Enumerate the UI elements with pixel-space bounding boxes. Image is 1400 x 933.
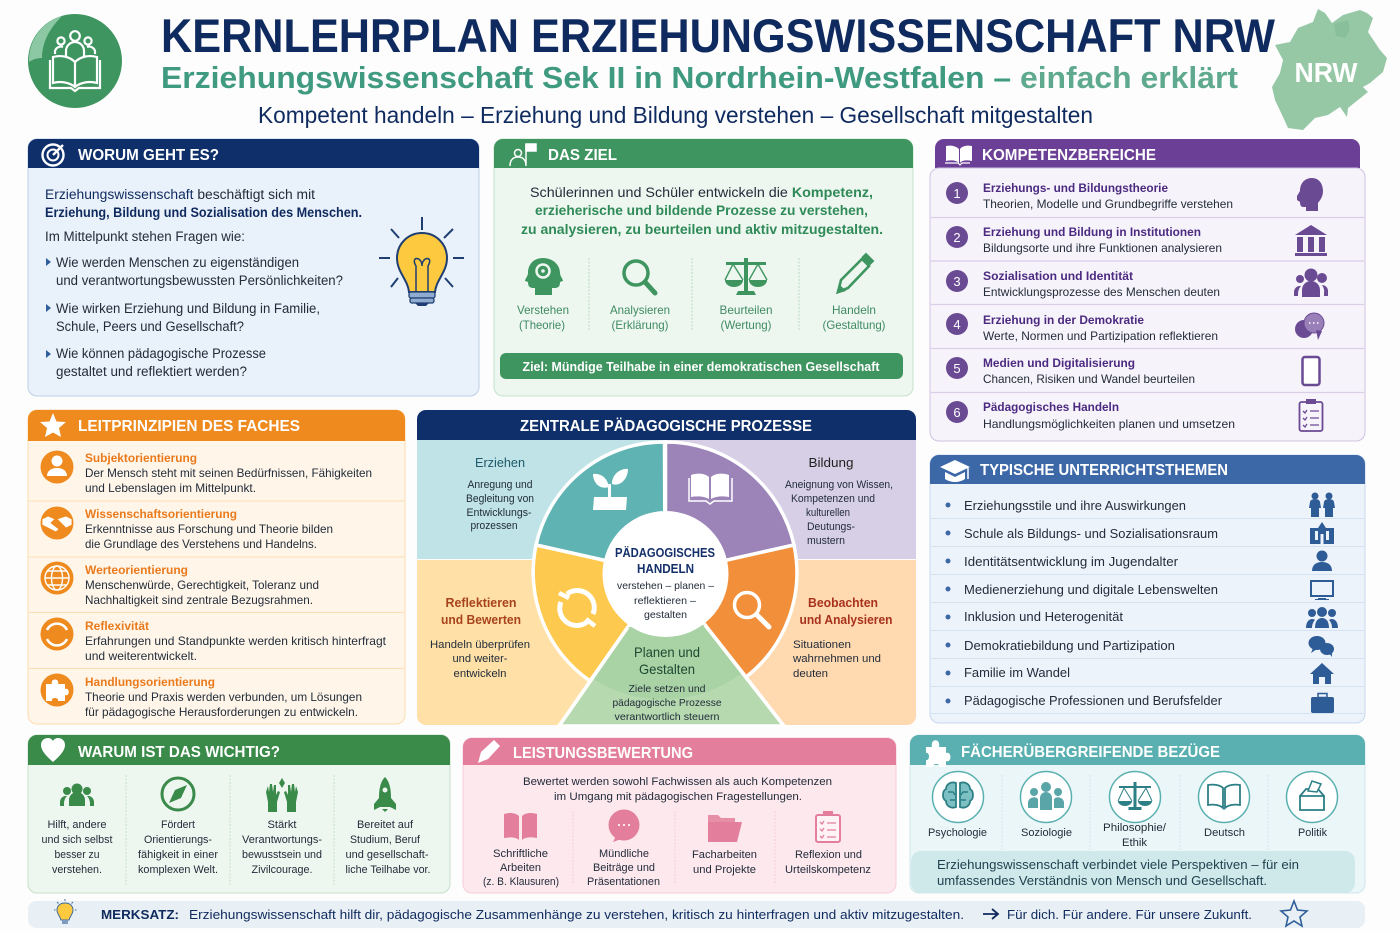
tagline: Kompetent handeln – Erziehung und Bildung verstehen – Gesellschaft mitgestalten — [258, 102, 1093, 128]
labels: (Wertung) — [720, 318, 772, 332]
item 4: Bereitet auf — [357, 819, 414, 831]
item 1 — [42, 784, 112, 876]
subject: Deutsch: Deutsch — [1204, 827, 1245, 839]
heading: LEISTUNGSBEWERTUNG — [513, 745, 693, 762]
item: clipboard: Urteilskompetenz — [785, 864, 871, 876]
text block: Schülerinnen und Schüler entwickeln die Kompetenz, — [530, 184, 873, 200]
center label: verstehen – planen – — [617, 580, 714, 592]
labels: Analysieren — [610, 303, 670, 317]
segment: Beobachten: deuten — [793, 668, 828, 680]
icon: graduation cap — [940, 460, 970, 482]
principle 4: Reflexivität — [85, 619, 149, 633]
summary band — [911, 851, 1355, 893]
panel: Zentrale pädagogische Prozesse — [417, 410, 916, 726]
icon: star outline — [1281, 901, 1307, 926]
panel: Leitprinzipien — [28, 410, 405, 724]
principle 1: Der Mensch steht mit seinen Bedürfnissen, Fähigkeiten — [85, 466, 372, 480]
segment: Erziehen: Begleitung von — [466, 493, 534, 505]
icon: pencil white — [478, 740, 500, 763]
icon: cycle arrows — [559, 591, 595, 626]
segment: Planen und Gestalten: Gestalten — [639, 661, 695, 677]
subject: Psychologie: Psychologie — [928, 827, 987, 839]
segment: Reflektieren: und Bewerten — [441, 612, 521, 627]
text block: Erziehung, Bildung und Sozialisation des Menschen. — [45, 205, 362, 220]
center label: HANDELN — [637, 562, 694, 576]
row 4: Erziehung in der Demokratie — [983, 313, 1144, 327]
icon: head with gear — [525, 258, 563, 295]
item: written work — [483, 813, 559, 888]
item 4: und gesellschaft- — [346, 849, 429, 861]
icon: magnifier — [624, 261, 655, 293]
item: oral: Präsentationen — [587, 876, 660, 888]
labels: Beurteilen — [720, 303, 772, 317]
principle 3: Werteorientierung — [85, 563, 188, 577]
panel: Das Ziel — [494, 139, 913, 396]
row 1 — [946, 178, 1323, 211]
item: written work: (z. B. Klausuren) — [483, 876, 559, 888]
icon: target — [42, 144, 64, 166]
panel: Typische Unterrichtsthemen — [930, 455, 1365, 723]
segment: Reflektieren: entwickeln — [454, 668, 506, 680]
segment: Beobachten: Beobachten — [808, 595, 878, 610]
icon: plant — [593, 469, 628, 510]
icon: open book — [945, 146, 972, 165]
segment: Bildung: mustern — [807, 535, 845, 547]
item 4: liche Teilhabe vor. — [346, 864, 430, 876]
icon: logo people and book — [28, 14, 122, 108]
principle 1: und Lebenslagen im Mittelpunkt. — [85, 481, 256, 495]
item: folder — [692, 815, 757, 876]
subtitle: Erziehungswissenschaft Sek II in Nordrhein-Westfalen – einfach erklärt — [161, 60, 1238, 95]
icon: person with flag — [510, 144, 536, 166]
segment: Erziehen: Entwicklungs- — [466, 507, 532, 519]
topic list: Erziehungsstile und ihre Auswirkungen — [964, 498, 1186, 513]
heading: KOMPETENZBEREICHE — [982, 147, 1156, 164]
topic list — [946, 498, 1223, 708]
segment: Reflektieren: Reflektieren — [446, 595, 517, 610]
row 6 — [946, 399, 1322, 431]
item: written work: Arbeiten — [500, 862, 541, 874]
intro text: im Umgang mit pädagogischen Fragestellungen. — [554, 791, 802, 803]
row 6: Handlungsmöglichkeiten planen und umsetzen — [983, 417, 1235, 431]
subject: Deutsch — [1198, 772, 1250, 839]
text block: Wie werden Menschen zu eigenständigen — [56, 255, 299, 270]
segment: Bildung — [689, 455, 893, 547]
item 2: Fördert — [161, 819, 195, 831]
segment: Reflektieren: und weiter- — [452, 653, 508, 665]
panel: Kompetenzbereiche — [930, 139, 1365, 441]
item 1: besser zu — [54, 849, 100, 861]
topic list: Familie im Wandel — [964, 665, 1070, 680]
topic list: Inklusion und Heterogenität — [964, 609, 1123, 624]
labels: Handeln — [832, 303, 876, 317]
row 5: 5 — [953, 361, 961, 376]
panel: Warum ist das wichtig — [28, 735, 450, 893]
icon: family — [1309, 492, 1335, 517]
principle 5: Handlungsorientierung — [85, 675, 215, 689]
principle 5: Theorie und Praxis werden verbunden, um Lösungen — [85, 690, 362, 704]
principle 3 — [40, 562, 319, 607]
icon: NRW map — [1272, 9, 1387, 130]
text block: Erziehungswissenschaft beschäftigt sich mit — [45, 187, 315, 202]
row separators — [931, 218, 1364, 392]
goal banner — [500, 353, 903, 379]
text block: Schule, Peers und Gesellschaft? — [56, 319, 244, 334]
label: MERKSATZ: — [101, 907, 179, 922]
segment: Bildung: Kompetenzen und — [791, 493, 875, 505]
row separators — [29, 501, 404, 668]
icon: pencil — [836, 254, 873, 294]
heading: LEITPRINZIPIEN DES FACHES — [78, 418, 300, 435]
text block: Wie können pädagogische Prozesse — [56, 346, 266, 361]
row 3: Entwicklungsprozesse des Menschen deuten — [983, 285, 1220, 299]
row 3 — [946, 268, 1328, 299]
icon: person — [1312, 550, 1332, 571]
row 4 — [946, 313, 1324, 343]
subject: Philosophie/Ethik: Philosophie/ — [1103, 822, 1167, 834]
topic list: Schule als Bildungs- und Sozialisationsraum — [964, 526, 1218, 541]
header — [28, 9, 1387, 130]
icon: group — [1306, 607, 1338, 628]
item 4: Studium, Beruf — [350, 834, 421, 846]
item: oral: Beiträge und — [593, 862, 655, 874]
item: folder: Facharbeiten — [692, 849, 757, 861]
segment: Erziehen: Anregung und — [468, 479, 532, 491]
labels: (Erklärung) — [612, 318, 668, 332]
segment: Beobachten — [734, 592, 893, 680]
heading: FÄCHERÜBERGREIFENDE BEZÜGE — [961, 742, 1220, 761]
item 1: verstehen. — [52, 864, 102, 876]
slogan: Für dich. Für andere. Für unsere Zukunft. — [1007, 907, 1252, 922]
center label: gestalten — [644, 609, 687, 621]
icon: monitor — [1311, 581, 1333, 600]
center label: reflektieren – — [634, 595, 696, 607]
segment: Planen und Gestalten: Planen und — [634, 644, 700, 660]
item: clipboard — [785, 811, 871, 876]
icon: puzzle — [926, 740, 950, 767]
item 3: Verantwortungs- — [242, 834, 322, 846]
row 1: Theorien, Modelle und Grundbegriffe verstehen — [983, 197, 1233, 211]
labels: (Theorie) — [519, 318, 565, 332]
item 2: komplexen Welt. — [138, 864, 218, 876]
principle 5: für pädagogische Herausforderungen zu entwickeln. — [85, 705, 358, 719]
row 4: 4 — [953, 317, 961, 332]
panel: Worum geht es — [28, 139, 479, 396]
segment: Erziehen: Erziehen — [475, 455, 525, 470]
text block — [521, 184, 883, 237]
icon: open book white — [689, 474, 732, 504]
item 4 — [346, 777, 430, 876]
segment: Planen und Gestalten: Ziele setzen und — [628, 683, 706, 695]
summary band: umfassendes Verständnis von Mensch und Gesellschaft. — [937, 873, 1267, 888]
item 3: bewusstsein und — [242, 849, 322, 861]
goal banner: Ziel: Mündige Teilhabe in einer demokratischen Gesellschaft — [522, 359, 880, 374]
segment: Erziehen — [466, 455, 628, 532]
dividers — [126, 775, 334, 885]
row 5 — [946, 356, 1320, 386]
principle 1 — [40, 450, 372, 495]
row 2 — [946, 225, 1327, 256]
segment: Planen und Gestalten: verantwortlich steuern — [614, 711, 720, 723]
segment: Beobachten: und Analysieren — [800, 612, 893, 627]
row 2: Bildungsorte und ihre Funktionen analysieren — [983, 241, 1222, 255]
segment: Reflektieren: Handeln überprüfen — [430, 639, 530, 651]
principle 4: und weiterentwickelt. — [85, 649, 197, 663]
item: written work: Schriftliche — [493, 848, 548, 860]
principle 4 — [40, 618, 387, 663]
row 1: Erziehungs- und Bildungstheorie — [983, 181, 1168, 195]
row 5: Chancen, Risiken und Wandel beurteilen — [983, 372, 1195, 386]
dividers — [1002, 775, 1268, 850]
text block: gestaltet und reflektiert werden? — [56, 364, 247, 379]
icon: school — [1310, 522, 1334, 544]
divider lines — [589, 258, 799, 331]
principle 5 — [40, 674, 362, 719]
item 2: fähigkeit in einer — [138, 849, 218, 861]
heading: DAS ZIEL — [548, 147, 617, 164]
heading: WARUM IST DAS WICHTIG? — [78, 744, 280, 761]
title: KERNLEHRPLAN ERZIEHUNGSWISSENSCHAFT NRW — [161, 9, 1276, 62]
icon: house — [1310, 663, 1334, 684]
row 6: Pädagogisches Handeln — [983, 400, 1119, 414]
subject: Soziologie — [1020, 772, 1072, 839]
labels: (Gestaltung) — [822, 318, 886, 332]
subject: Politik — [1286, 772, 1338, 839]
topic icons — [1306, 492, 1338, 713]
row 3: Sozialisation und Identität — [983, 269, 1133, 283]
item: oral — [587, 810, 660, 888]
text block: erzieherische und bildende Prozesse zu verstehen, — [535, 202, 868, 218]
row 6: 6 — [953, 405, 961, 420]
center label: PÄDAGOGISCHES — [615, 545, 715, 560]
segment: Erziehen: prozessen — [470, 520, 518, 532]
row 2: 2 — [953, 230, 961, 245]
item: oral: Mündliche — [599, 848, 649, 860]
principle 4: Erfahrungen und Standpunkte werden kritisch hinterfragt — [85, 634, 387, 648]
row 3: 3 — [953, 274, 961, 289]
intro text — [523, 776, 832, 803]
row 2: Erziehung und Bildung in Institutionen — [983, 225, 1201, 239]
topic list: Pädagogische Professionen und Berufsfelder — [964, 693, 1223, 708]
item 3: Zivilcourage. — [252, 864, 312, 876]
icon: NRW map: NRW — [1294, 57, 1358, 88]
topic list: Medienerziehung und digitale Lebenswelten — [964, 582, 1218, 597]
principle 2 — [40, 506, 333, 551]
center label — [615, 545, 715, 621]
arrow — [983, 909, 998, 919]
item 3 — [242, 778, 322, 876]
subject: Philosophie/Ethik — [1103, 772, 1167, 849]
icon: chat — [1308, 636, 1334, 657]
segment: Planen und Gestalten: pädagogische Prozesse — [612, 697, 722, 709]
sentence: Erziehungswissenschaft hilft dir, pädagogische Zusammenhänge zu verstehen, kritisch zu hinterfragen und aktiv mitzugestalten. — [189, 907, 964, 922]
item 2: Orientierungs- — [144, 834, 212, 846]
segment: Bildung: Aneignung von Wissen, — [785, 479, 893, 491]
icon: scales — [725, 258, 767, 295]
labels: Verstehen — [517, 303, 569, 317]
icon: star — [40, 413, 66, 437]
quadrant backgrounds — [417, 440, 916, 725]
heading: TYPISCHE UNTERRICHTSTHEMEN — [980, 462, 1228, 479]
subject: Philosophie/Ethik: Ethik — [1122, 837, 1147, 849]
text block: und verantwortungsbewussten Persönlichkeiten? — [56, 273, 343, 288]
principle 2: Erkenntnisse aus Forschung und Theorie bilden — [85, 522, 333, 536]
segment: Reflektieren — [430, 591, 595, 680]
subject: Psychologie — [928, 772, 987, 839]
icon: heart — [41, 738, 65, 762]
text block: Im Mittelpunkt stehen Fragen wie: — [45, 229, 245, 244]
heading: WORUM GEHT ES? — [78, 147, 219, 164]
subject: Soziologie: Soziologie — [1021, 827, 1072, 839]
panel: Merksatz — [28, 899, 1365, 928]
intro text: Bewertet werden sowohl Fachwissen als auch Kompetenzen — [523, 776, 832, 788]
panel: Fächerübergreifende Bezüge — [910, 735, 1365, 893]
segment: Bildung: Deutungs- — [807, 521, 855, 533]
principle 2: die Grundlage des Verstehens und Handelns. — [85, 537, 317, 551]
item 1: Hilft, andere — [48, 819, 106, 831]
row 1: 1 — [953, 186, 961, 201]
row 5: Medien und Digitalisierung — [983, 356, 1135, 370]
icon: small lightbulb — [54, 899, 76, 924]
summary band: Erziehungswissenschaft verbindet viele Perspektiven – für ein — [937, 857, 1299, 872]
segment: Bildung: kulturellen — [806, 507, 850, 519]
principle 1: Subjektorientierung — [85, 451, 197, 465]
icon: magnifier white — [734, 592, 769, 627]
item: folder: und Projekte — [693, 864, 756, 876]
text block: Wie wirken Erziehung und Bildung in Familie, — [56, 301, 320, 316]
heading: ZENTRALE PÄDAGOGISCHE PROZESSE — [520, 417, 812, 435]
segment: Planen und Gestalten — [612, 644, 722, 723]
row 4: Werte, Normen und Partizipation reflektieren — [983, 329, 1218, 343]
text block — [45, 187, 362, 379]
item 2 — [138, 778, 218, 876]
text block: zu analysieren, zu beurteilen und aktiv mitzugestalten. — [521, 221, 883, 237]
icon: briefcase — [1311, 694, 1334, 713]
principle 3: Nachhaltigkeit sind zentrale Bezugsrahmen. — [85, 593, 313, 607]
item 3: Stärkt — [268, 819, 296, 831]
icon: lightbulb — [379, 217, 464, 306]
item: clipboard: Reflexion und — [795, 849, 862, 861]
segment: Beobachten: Situationen — [793, 639, 851, 651]
topic list: Identitätsentwicklung im Jugendalter — [964, 554, 1179, 569]
segment: Beobachten: wahrnehmen und — [792, 653, 881, 665]
panel: Leistungsbewertung — [463, 738, 896, 893]
process wheel — [533, 442, 797, 726]
dividers — [573, 811, 775, 885]
subject: Politik: Politik — [1298, 827, 1327, 839]
topic list: Demokratiebildung und Partizipation — [964, 638, 1175, 653]
segment: Bildung: Bildung — [808, 455, 854, 470]
labels — [517, 303, 886, 332]
row separators — [931, 518, 1364, 714]
item 1: und sich selbst — [42, 834, 112, 846]
principle 2: Wissenschaftsorientierung — [85, 507, 237, 521]
principle 3: Menschenwürde, Gerechtigkeit, Toleranz und — [85, 578, 319, 592]
